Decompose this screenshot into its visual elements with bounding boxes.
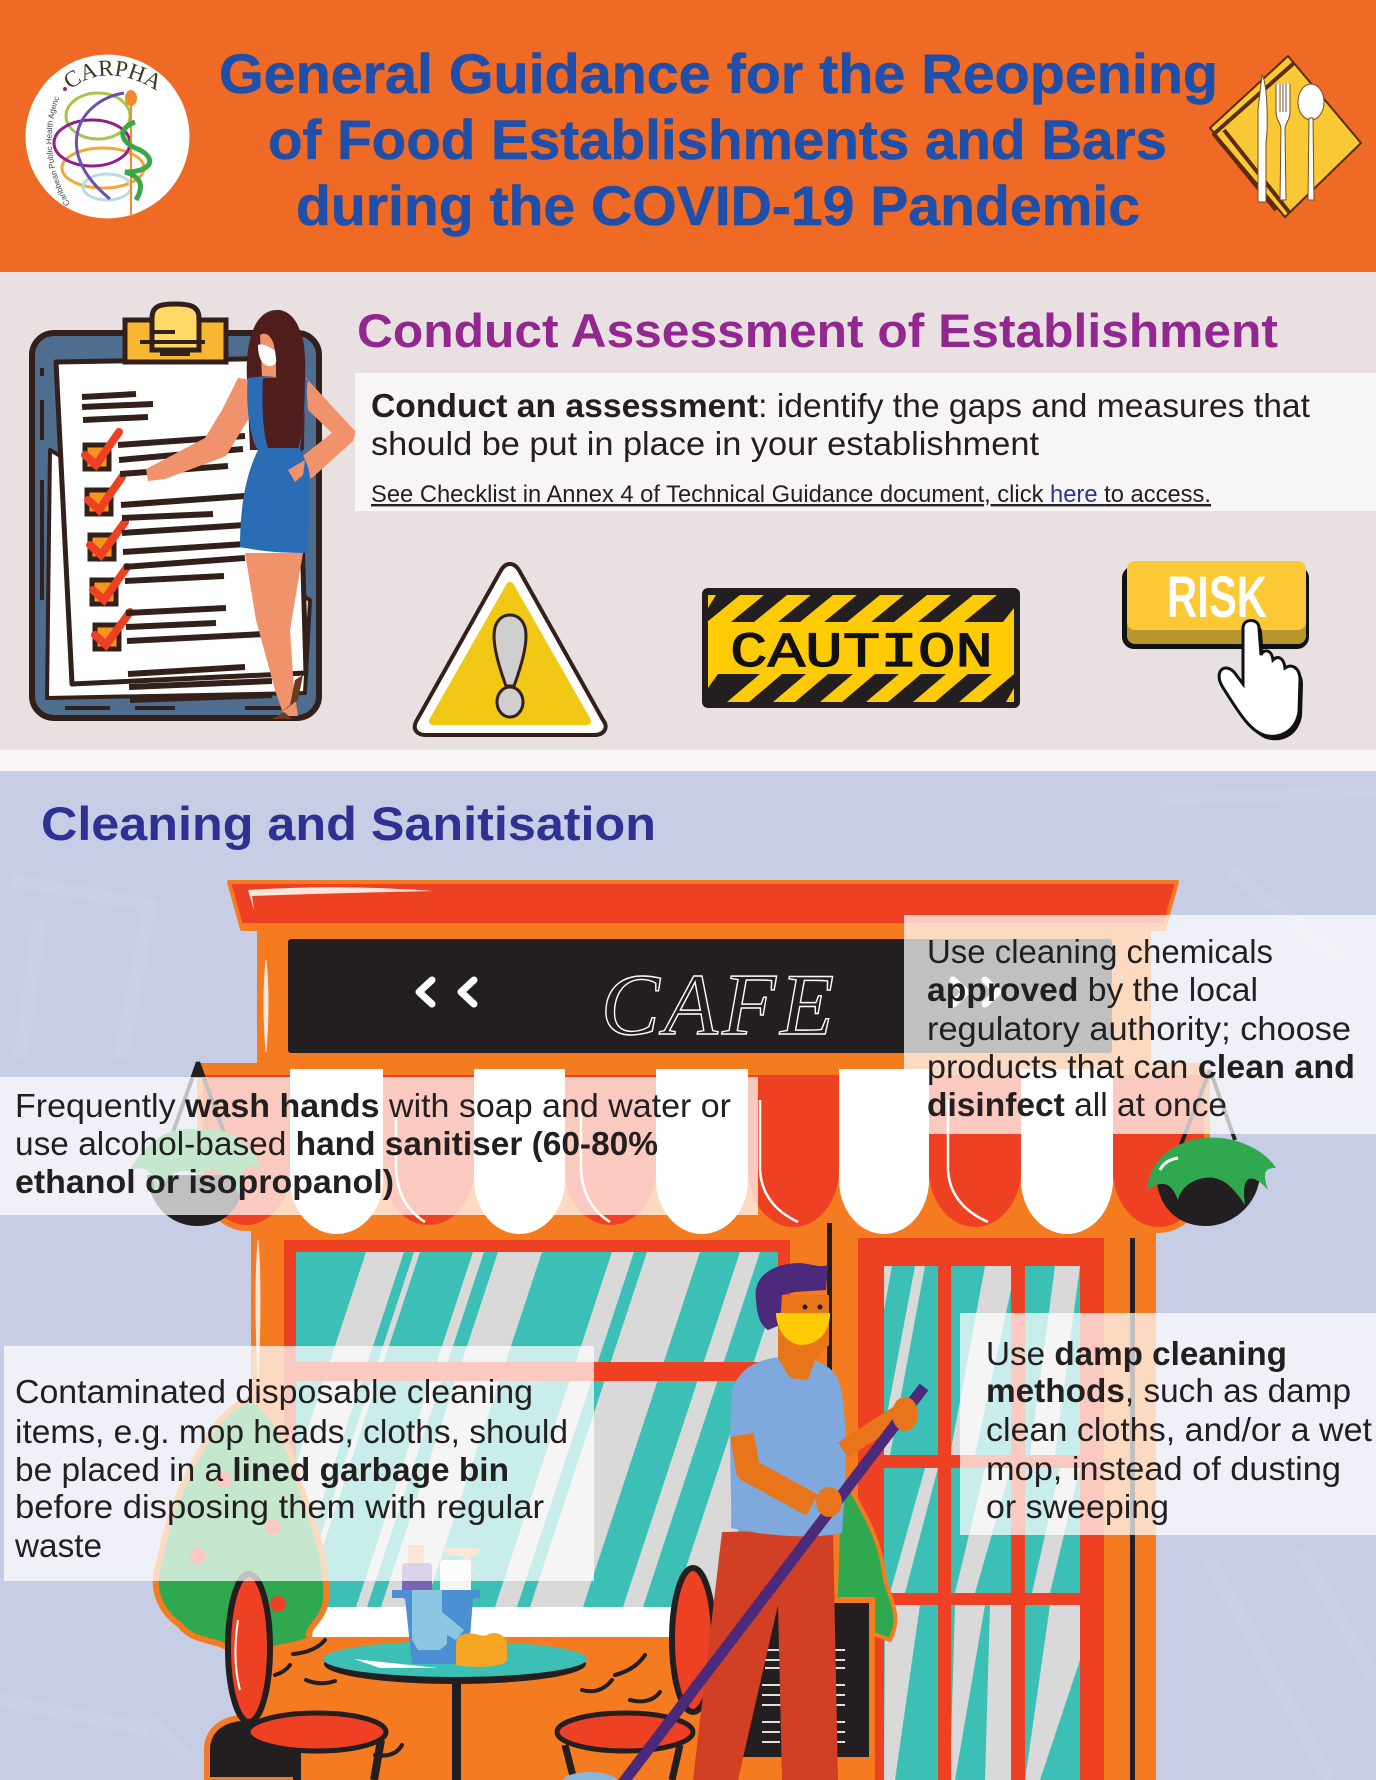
illustration: woman in blue dress [146,310,356,719]
callout: wash hands [0,1077,758,1215]
callout: damp cleaning: clean cloths, and/or a wet [986,1411,1372,1448]
panel: header banner [0,0,1376,272]
icon: CARPHA logo [26,54,190,218]
callout: damp cleaning: mop, instead of dusting [986,1450,1341,1487]
illustration: man mopping [562,1263,924,1780]
callout: wash hands: ethanol or isopropanol) [15,1163,394,1200]
callout: wash hands: use alcohol-based hand sanitiser (60-80% [15,1125,658,1162]
callout: cleaning chemicals: products that can clean and [927,1048,1355,1085]
title: of Food Establishments and Bars [268,108,1167,171]
illustration: left bush [156,1400,326,1650]
icon: warning triangle [415,564,606,735]
heading: conduct assessment: Conduct Assessment of Establishment [357,304,1278,357]
callout: cleaning chemicals: approved by the local [927,971,1258,1008]
icon: CARPHA logo: CARPHA [65,60,158,90]
callout: damp cleaning [960,1313,1376,1535]
panel: conduct assessment [0,272,1376,771]
text block: assessment: See Checklist in Annex 4 of Technical Guidance document, click here to access. [371,481,1211,508]
icon: risk button: RISK [1167,565,1267,630]
text block: assessment: Conduct an assessment: identify the gaps and measures that [371,387,1310,424]
callout: damp cleaning: or sweeping [986,1488,1169,1525]
bucket and glove [392,1590,480,1664]
illustration: left hanging plant [130,1062,262,1226]
callout: garbage bin: be placed in a lined garbage bin [15,1451,509,1488]
callout: cleaning chemicals: regulatory authority; choose [927,1010,1351,1047]
illustration: right chair [557,1568,714,1780]
callout: cleaning chemicals: Use cleaning chemicals [927,933,1273,970]
panel: cleaning and sanitisation [43,806,1276,1780]
heading: cleaning and sanitisation: Cleaning and Sanitisation [41,797,656,850]
title [219,42,1218,237]
callout: cleaning chemicals: disinfect all at once [927,1086,1227,1123]
text block: assessment: should be put in place in your establishment [371,425,1039,462]
callout: garbage bin: items, e.g. mop heads, cloths, should [15,1413,568,1450]
illustration: cafe building [200,882,1207,1780]
title: during the COVID-19 Pandemic [296,174,1140,237]
left window [284,1240,790,1637]
sponge [456,1633,507,1667]
callout: cleaning chemicals [904,915,1376,1134]
illustration: chalkboard and plant [736,1470,895,1780]
table top [323,1641,587,1780]
awning [200,1063,1207,1238]
cafe sign: CAFE [601,957,834,1054]
door frame [858,1238,1104,1780]
icon: caution sign: CAUTION [730,625,993,681]
title: General Guidance for the Reopening [219,42,1218,105]
illustration: left chair [207,1574,386,1780]
icon: caution sign [702,588,1020,708]
callout: damp cleaning: methods, such as damp [986,1372,1351,1409]
callout: wash hands: Frequently wash hands with soap and water or [15,1087,731,1124]
cleaning bottles [402,1545,480,1599]
cafe sign [288,939,1112,1054]
callout: damp cleaning: Use damp cleaning [986,1335,1287,1372]
icon: risk button [1122,561,1309,740]
illustration: table with cleaning supplies [323,1545,587,1780]
callout: garbage bin [4,1346,594,1581]
icon: place setting [1210,56,1361,217]
text block: assessment [355,373,1376,511]
callout: garbage bin: Contaminated disposable cleaning [15,1373,533,1410]
illustration: clipboard checklist [32,304,319,718]
callout: garbage bin: before disposing them with regular [15,1488,544,1525]
callout: garbage bin: waste [14,1527,102,1564]
illustration: right hanging plant [1147,1070,1276,1226]
